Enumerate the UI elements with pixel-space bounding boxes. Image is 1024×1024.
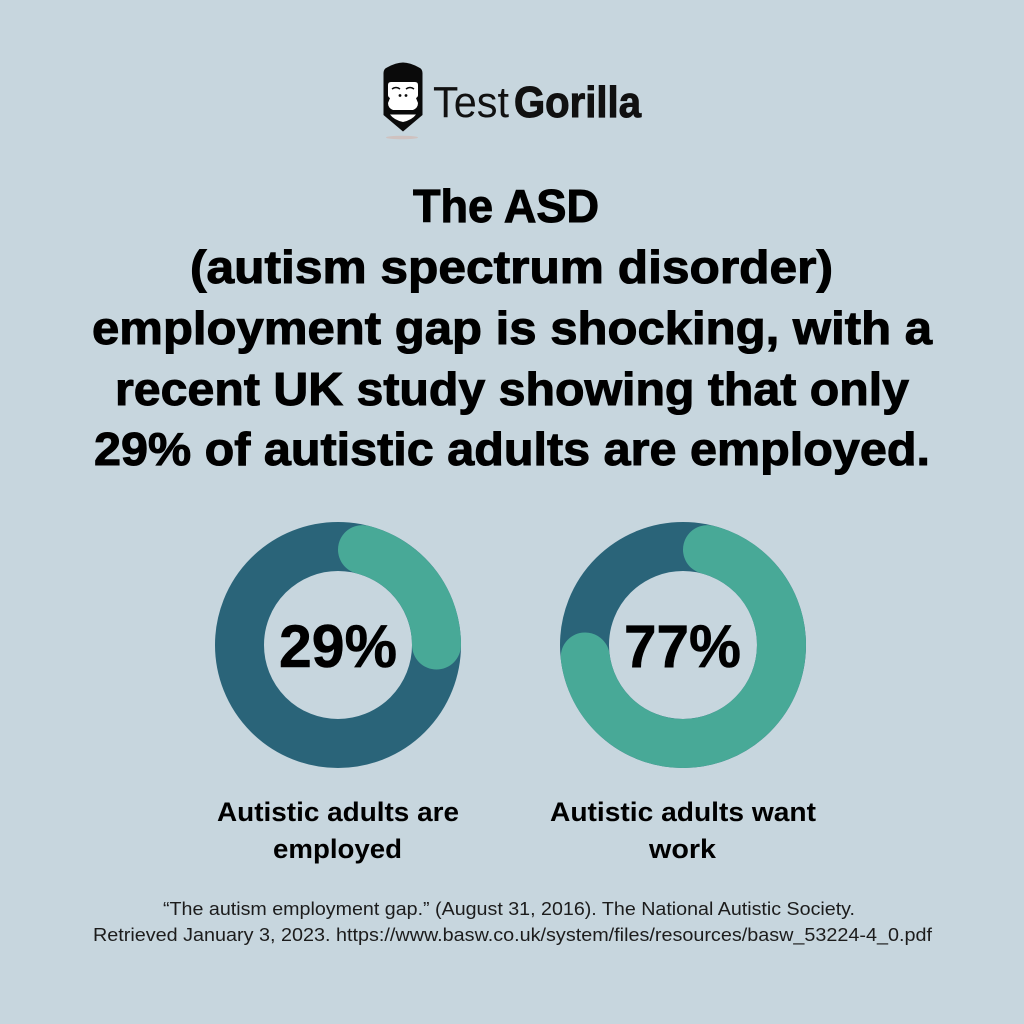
title: recent UK study showing that only [115, 363, 909, 415]
logo: TestGorilla [384, 62, 641, 139]
wordmark: Test [433, 78, 509, 127]
label: autistic adults are employed [217, 797, 459, 864]
title: employment gap is shocking, with a [92, 302, 932, 354]
label: autistic adults are employed: employed [273, 834, 402, 864]
icon: gorilla pencil [384, 62, 422, 139]
label: autistic adults want work: Autistic adults want [550, 797, 816, 827]
donut chart: 77% want work [584, 546, 782, 744]
donut chart: 29% employed [240, 546, 436, 744]
donut chart: 77% want work: 77% [624, 613, 741, 680]
label: autistic adults are employed: Autistic adults are [217, 797, 459, 827]
logo: TestGorilla: Gorilla [514, 78, 641, 127]
label: autistic adults want work [550, 797, 816, 864]
title: (autism spectrum disorder) [190, 241, 833, 293]
title [92, 180, 932, 475]
title: The ASD [413, 180, 599, 232]
donut chart: 29% employed: 29% [279, 613, 397, 680]
title: 29% of autistic adults are employed. [94, 423, 930, 475]
citation: Retrieved January 3, 2023. https://www.basw.co.uk/system/files/resources/basw_53224-4_0.pdf [93, 924, 933, 946]
citation [93, 898, 933, 946]
citation: “The autism employment gap.” (August 31, 2016). The National Autistic Society. [163, 898, 855, 919]
label: autistic adults want work: work [648, 834, 717, 864]
